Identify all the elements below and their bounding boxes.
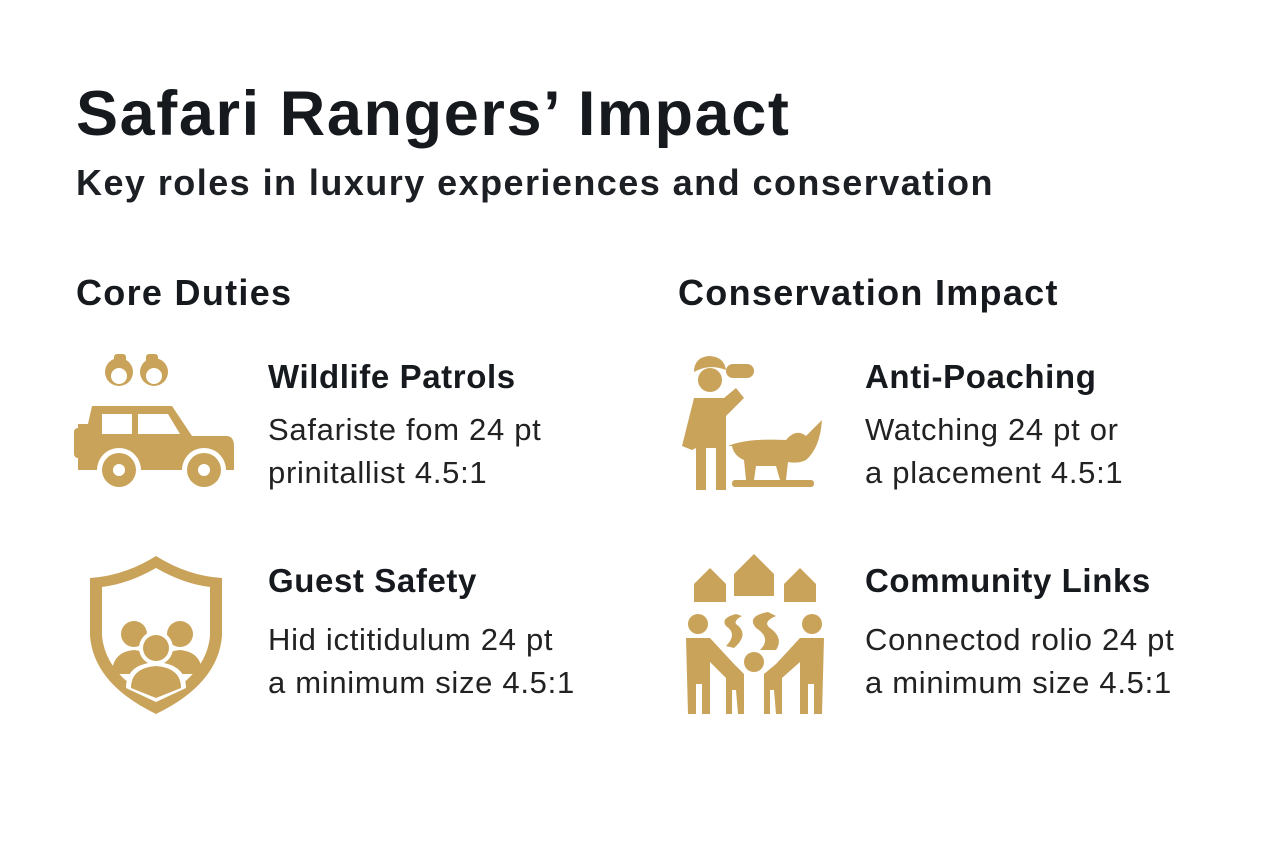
item: wildlife patrols: Safariste fom 24 pt bbox=[268, 412, 542, 447]
item: anti-poaching: Anti-Poaching bbox=[865, 358, 1096, 395]
item: community links: a minimum size 4.5:1 bbox=[865, 665, 1172, 700]
item: anti-poaching: Watching 24 pt or bbox=[865, 412, 1119, 447]
item: community links: Connectod rolio 24 pt bbox=[865, 622, 1174, 657]
icon: ranger with rhino bbox=[682, 356, 822, 490]
heading: core duties: Core Duties bbox=[76, 272, 292, 313]
title: Safari Rangers’ Impact bbox=[76, 79, 790, 149]
item: wildlife patrols: prinitallist 4.5:1 bbox=[268, 455, 487, 490]
item: guest safety bbox=[268, 562, 575, 700]
item: community links: Community Links bbox=[865, 562, 1151, 599]
icon: community links bbox=[686, 554, 824, 714]
icon: jeep with binoculars bbox=[74, 354, 234, 487]
item: guest safety: Hid ictitidulum 24 pt bbox=[268, 622, 553, 657]
item: community links bbox=[865, 562, 1174, 700]
subtitle: Key roles in luxury experiences and conservation bbox=[76, 162, 994, 203]
icon: shield with people bbox=[90, 556, 222, 714]
item: wildlife patrols: Wildlife Patrols bbox=[268, 358, 516, 395]
item: anti-poaching: a placement 4.5:1 bbox=[865, 455, 1123, 490]
item: wildlife patrols bbox=[268, 358, 542, 490]
heading: conservation impact: Conservation Impact bbox=[678, 272, 1059, 313]
item: guest safety: Guest Safety bbox=[268, 562, 477, 599]
item: guest safety: a minimum size 4.5:1 bbox=[268, 665, 575, 700]
item: anti-poaching bbox=[865, 358, 1123, 490]
